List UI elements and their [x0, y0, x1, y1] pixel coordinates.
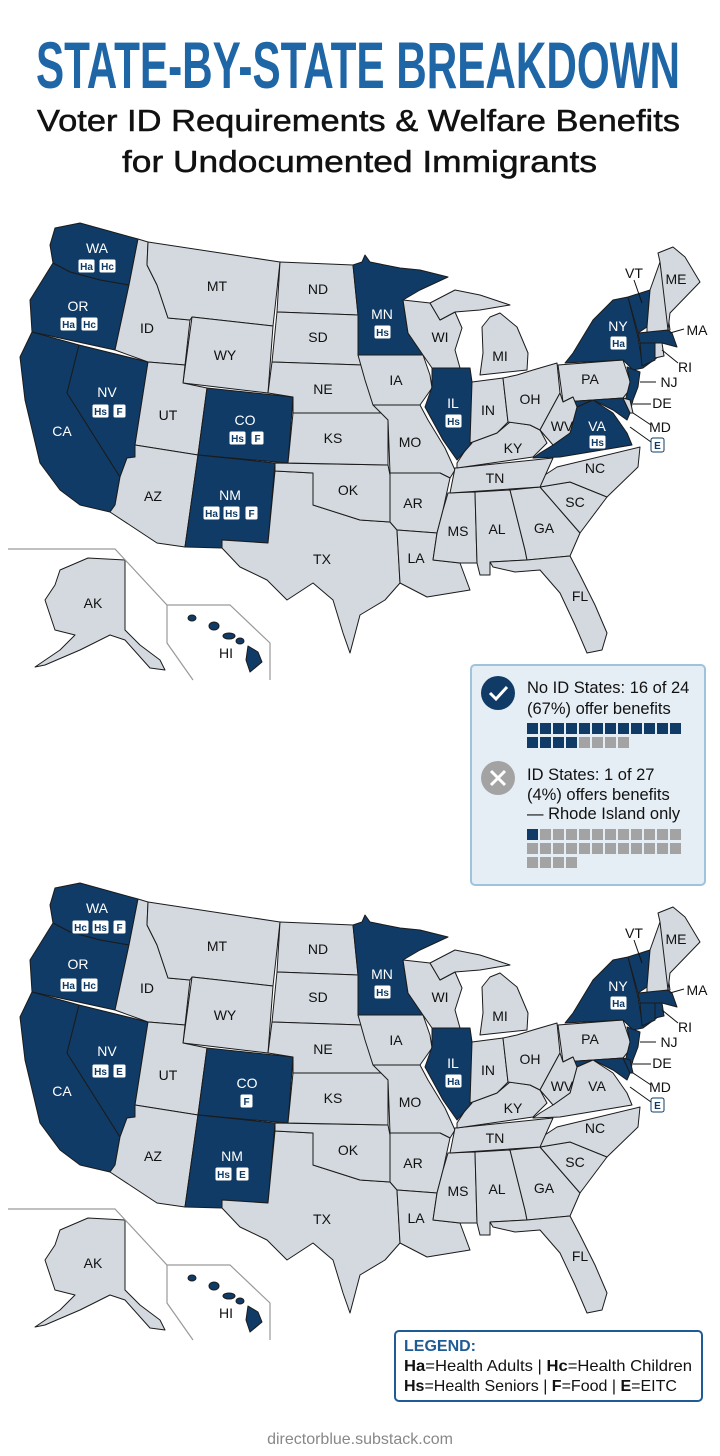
map: voter ID / no-ID states (map 1): Hs	[225, 509, 238, 520]
map: voter ID / no-ID states (map 1): FL	[572, 588, 588, 604]
map: welfare benefits (map 2): ND	[308, 941, 328, 957]
map: voter ID / no-ID states (map 1): Ha	[80, 262, 93, 273]
map: welfare benefits (map 2): SC	[565, 1154, 585, 1170]
map: welfare benefits (map 2): AL	[488, 1181, 506, 1197]
map: welfare benefits (map 2): VA	[588, 1078, 606, 1094]
map: voter ID / no-ID states (map 1): MO	[399, 434, 421, 450]
map: welfare benefits (map 2): MO	[399, 1094, 421, 1110]
map: voter ID / no-ID states (map 1): E	[654, 441, 661, 452]
map: welfare benefits (map 2): MN	[371, 966, 393, 982]
map: welfare benefits (map 2): E	[654, 1101, 661, 1112]
map: welfare benefits (map 2): AZ	[144, 1148, 162, 1164]
map: voter ID / no-ID states (map 1): RI	[678, 359, 692, 375]
map: voter ID / no-ID states (map 1): NM	[219, 487, 241, 503]
map: voter ID / no-ID states (map 1): VA	[588, 418, 606, 434]
icon: check	[481, 676, 515, 710]
map: voter ID / no-ID states (map 1): Hs	[591, 438, 604, 449]
callout: no-ID vs ID states stats: — Rhode Island only	[527, 805, 681, 823]
map: welfare benefits (map 2): WI	[431, 989, 449, 1005]
map: voter ID / no-ID states (map 1): OK	[338, 482, 359, 498]
map: voter ID / no-ID states (map 1): AK	[84, 595, 103, 611]
map: welfare benefits (map 2): TX	[313, 1211, 332, 1227]
map: welfare benefits (map 2): E	[116, 1067, 123, 1078]
icon: cross	[481, 761, 515, 795]
map: voter ID / no-ID states (map 1): F	[116, 407, 123, 418]
map: voter ID / no-ID states (map 1): F	[248, 509, 255, 520]
legend	[395, 1331, 702, 1401]
map: welfare benefits (map 2): SD	[308, 989, 328, 1005]
map: voter ID / no-ID states (map 1): MN	[371, 306, 393, 322]
map: welfare benefits (map 2): KY	[504, 1100, 523, 1116]
map: voter ID / no-ID states (map 1): DE	[652, 395, 672, 411]
map: welfare benefits (map 2): MD	[649, 1079, 671, 1095]
legend: LEGEND:	[404, 1338, 476, 1355]
map: voter ID / no-ID states (map 1): Hs	[447, 417, 460, 428]
map: voter ID / no-ID states (map 1): Hc	[83, 320, 96, 331]
map: voter ID / no-ID states (map 1): KS	[324, 430, 342, 446]
map: voter ID / no-ID states (map 1): NJ	[660, 374, 678, 390]
map: welfare benefits (map 2): OK	[338, 1142, 359, 1158]
map: welfare benefits (map 2): NJ	[660, 1034, 678, 1050]
map: voter ID / no-ID states (map 1): Hs	[376, 328, 389, 339]
map: welfare benefits (map 2): CO	[236, 1075, 258, 1091]
map: voter ID / no-ID states (map 1): Hs	[94, 407, 107, 418]
map: voter ID / no-ID states (map 1): MD	[649, 419, 671, 435]
callout: no-ID vs ID states stats: ID States: 1 of 27	[527, 766, 654, 784]
map: voter ID / no-ID states (map 1): LA	[407, 550, 425, 566]
map: welfare benefits (map 2): NV	[97, 1043, 117, 1059]
map: voter ID / no-ID states (map 1): KY	[504, 440, 523, 456]
map: welfare benefits (map 2): F	[116, 923, 123, 934]
subtitle: Voter ID Requirements & Welfare Benefits	[37, 103, 680, 138]
map: welfare benefits (map 2): ME	[666, 931, 686, 947]
map: welfare benefits (map 2): OH	[520, 1051, 540, 1067]
map: welfare benefits (map 2): IN	[481, 1062, 495, 1078]
map: voter ID / no-ID states (map 1): NV	[97, 384, 117, 400]
legend: Ha=Health Adults | Hc=Health Children	[404, 1358, 692, 1375]
map: voter ID / no-ID states (map 1): MI	[492, 348, 508, 364]
map: voter ID / no-ID states (map 1): CO	[234, 412, 256, 428]
map: welfare benefits (map 2): MA	[686, 982, 708, 998]
map: voter ID / no-ID states (map 1): PA	[581, 371, 599, 387]
map: voter ID / no-ID states (map 1): AR	[403, 495, 423, 511]
map: voter ID / no-ID states (map 1): NC	[585, 460, 605, 476]
map: welfare benefits (map 2): GA	[534, 1180, 555, 1196]
callout: no-ID vs ID states stats: (4%) offers benefits	[527, 786, 670, 804]
map: voter ID / no-ID states (map 1): OH	[520, 391, 540, 407]
map: welfare benefits (map 2): WA	[86, 900, 109, 916]
map: voter ID / no-ID states (map 1): NY	[608, 318, 628, 334]
map: voter ID / no-ID states (map 1): TX	[313, 551, 332, 567]
map: voter ID / no-ID states (map 1): IL	[447, 395, 459, 411]
map: welfare benefits (map 2): NC	[585, 1120, 605, 1136]
map: welfare benefits (map 2): Hs	[94, 1067, 107, 1078]
map: welfare benefits (map 2): LA	[407, 1210, 425, 1226]
legend: Hs=Health Seniors | F=Food | E=EITC	[404, 1378, 677, 1395]
map: voter ID / no-ID states (map 1): AL	[488, 521, 506, 537]
map: welfare benefits (map 2): PA	[581, 1031, 599, 1047]
map: welfare benefits (map 2): Hc	[83, 981, 96, 992]
map: welfare benefits (map 2): FL	[572, 1248, 588, 1264]
map: welfare benefits (map 2): UT	[159, 1067, 178, 1083]
map: welfare benefits (map 2): NE	[313, 1041, 333, 1057]
map: voter ID / no-ID states (map 1): WY	[214, 347, 237, 363]
map: voter ID / no-ID states (map 1): MS	[448, 523, 468, 539]
map: welfare benefits (map 2): VT	[625, 925, 643, 941]
map: voter ID / no-ID states (map 1)	[8, 223, 708, 680]
map: welfare benefits (map 2): NM	[221, 1148, 243, 1164]
map: voter ID / no-ID states (map 1): SC	[565, 494, 585, 510]
map: welfare benefits (map 2): MT	[207, 938, 228, 954]
map: welfare benefits (map 2): WV	[551, 1078, 574, 1094]
map: voter ID / no-ID states (map 1): TN	[486, 470, 504, 486]
subtitle	[37, 103, 680, 179]
map: voter ID / no-ID states (map 1): WA	[86, 240, 109, 256]
map: voter ID / no-ID states (map 1): Ha	[205, 509, 218, 520]
map: voter ID / no-ID states (map 1): VT	[625, 265, 643, 281]
footer: directorblue.substack.com	[267, 1431, 453, 1448]
map: welfare benefits (map 2): AK	[84, 1255, 103, 1271]
map: voter ID / no-ID states (map 1): ND	[308, 281, 328, 297]
map: voter ID / no-ID states (map 1): Ha	[612, 339, 625, 350]
map: voter ID / no-ID states (map 1): Hc	[101, 262, 114, 273]
callout: no-ID vs ID states stats: No ID States: 16 of 24	[527, 679, 689, 697]
map: welfare benefits (map 2): RI	[678, 1019, 692, 1035]
map: voter ID / no-ID states (map 1): MA	[686, 322, 708, 338]
map: voter ID / no-ID states (map 1): Hs	[231, 434, 244, 445]
map: welfare benefits (map 2): Ha	[612, 999, 625, 1010]
map: welfare benefits (map 2): MI	[492, 1008, 508, 1024]
map: welfare benefits (map 2): ID	[140, 980, 154, 996]
map: voter ID / no-ID states (map 1): CA	[52, 423, 72, 439]
map: welfare benefits (map 2): AR	[403, 1155, 423, 1171]
map: welfare benefits (map 2): TN	[486, 1130, 504, 1146]
map: welfare benefits (map 2): Ha	[62, 981, 75, 992]
map: welfare benefits (map 2): KS	[324, 1090, 342, 1106]
map: welfare benefits (map 2)	[8, 883, 708, 1340]
map: voter ID / no-ID states (map 1): F	[254, 434, 261, 445]
map: voter ID / no-ID states (map 1): MT	[207, 278, 228, 294]
callout: no-ID vs ID states stats	[471, 665, 705, 885]
subtitle: for Undocumented Immigrants	[122, 144, 597, 179]
map: voter ID / no-ID states (map 1): IN	[481, 402, 495, 418]
map: voter ID / no-ID states (map 1): Ha	[62, 320, 75, 331]
map: voter ID / no-ID states (map 1): GA	[534, 520, 555, 536]
map: voter ID / no-ID states (map 1): IA	[389, 372, 403, 388]
map: welfare benefits (map 2): MS	[448, 1183, 468, 1199]
map: welfare benefits (map 2): WY	[214, 1007, 237, 1023]
map: voter ID / no-ID states (map 1): WV	[551, 418, 574, 434]
map: voter ID / no-ID states (map 1): NE	[313, 381, 333, 397]
map: voter ID / no-ID states (map 1): ME	[666, 271, 686, 287]
map: welfare benefits (map 2): Hc	[74, 923, 87, 934]
map: welfare benefits (map 2): IA	[389, 1032, 403, 1048]
map: welfare benefits (map 2): Hs	[376, 988, 389, 999]
map: welfare benefits (map 2): IL	[447, 1055, 459, 1071]
map: voter ID / no-ID states (map 1): UT	[159, 407, 178, 423]
map: voter ID / no-ID states (map 1): OR	[68, 298, 88, 314]
map: welfare benefits (map 2): HI	[219, 1305, 233, 1321]
map: welfare benefits (map 2): F	[243, 1097, 250, 1108]
callout: no-ID vs ID states stats: (67%) offer benefits	[527, 700, 671, 718]
map: voter ID / no-ID states (map 1): AZ	[144, 488, 162, 504]
map: voter ID / no-ID states (map 1): HI	[219, 645, 233, 661]
map: voter ID / no-ID states (map 1): SD	[308, 329, 328, 345]
map: welfare benefits (map 2): NY	[608, 978, 628, 994]
map: welfare benefits (map 2): DE	[652, 1055, 672, 1071]
map: voter ID / no-ID states (map 1): ID	[140, 320, 154, 336]
map: welfare benefits (map 2): Hs	[94, 923, 107, 934]
map: welfare benefits (map 2): E	[239, 1170, 246, 1181]
map: welfare benefits (map 2): OR	[68, 956, 88, 972]
map: welfare benefits (map 2): CA	[52, 1083, 72, 1099]
map: welfare benefits (map 2): Hs	[217, 1170, 230, 1181]
map: welfare benefits (map 2): Ha	[447, 1077, 460, 1088]
map: voter ID / no-ID states (map 1): WI	[431, 329, 449, 345]
